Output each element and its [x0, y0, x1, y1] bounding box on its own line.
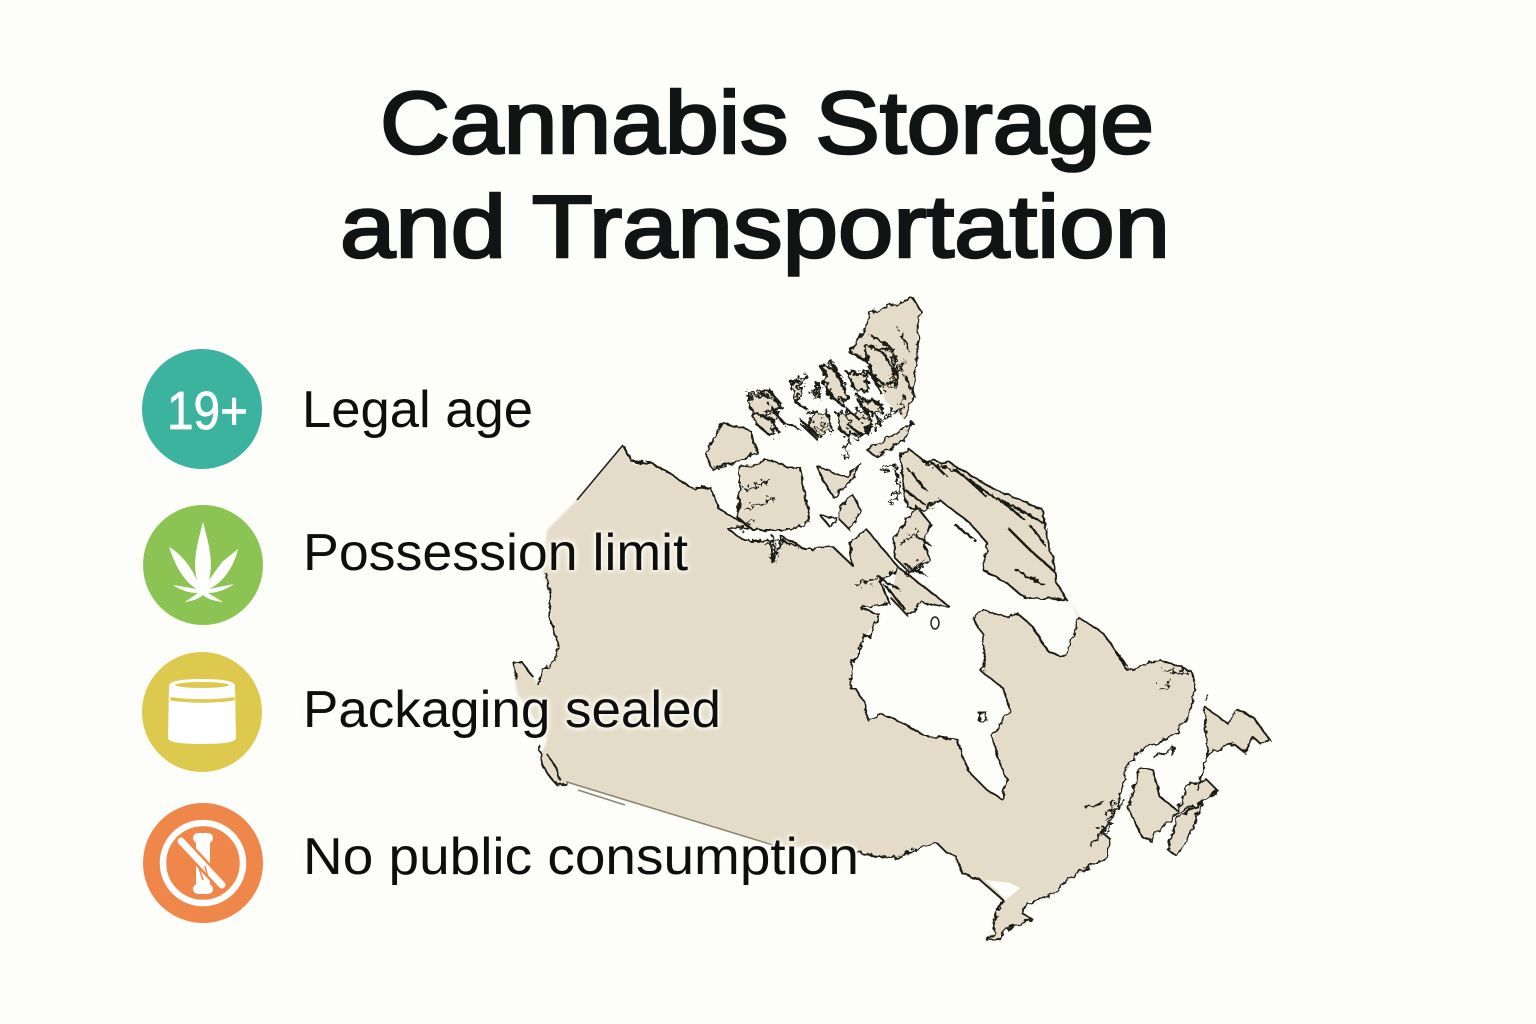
Baffin and Foxe Basin scribbles [740, 462, 1055, 610]
icon: no smoking sign [143, 803, 263, 923]
Ellesmere Island [850, 298, 920, 420]
Atlantic coastlines [1085, 695, 1270, 856]
icon: 19+ badge [142, 349, 262, 469]
Banks Island [705, 423, 757, 470]
Southampton Island [893, 507, 930, 573]
Arctic islands [705, 298, 1067, 615]
label: legal age: Legal age [302, 381, 533, 439]
Queen Elizabeth Islands scribbles [748, 330, 913, 460]
Atlantic provinces [1085, 695, 1270, 856]
title: and Transportation [340, 177, 1170, 276]
Melville Peninsula [890, 567, 950, 615]
Coats island oval [931, 617, 939, 629]
Nova Scotia peninsula [1168, 803, 1203, 856]
label: no public consumption: No public consumption [303, 828, 859, 886]
legend item: legal age [142, 349, 533, 469]
Alaska border line [577, 445, 623, 500]
legend item: possession limit [143, 505, 689, 625]
Nova Scotia and New Brunswick [1128, 767, 1217, 840]
Quebec coast scribbles [772, 540, 1188, 835]
Arctic coastlines [705, 298, 1067, 615]
Hudson Bay island [978, 712, 987, 722]
map of Canada [513, 298, 1270, 940]
Newfoundland [1205, 707, 1270, 755]
Devon Island [867, 423, 913, 457]
Pacific coastline [513, 573, 567, 785]
Queen Elizabeth Islands patches [748, 347, 896, 437]
northern and eastern coastline [623, 445, 1196, 940]
Victoria Island [737, 460, 810, 530]
mainland [513, 445, 1196, 940]
Lake Huron cut-out [985, 880, 1020, 900]
icon: sealed jar [142, 652, 262, 772]
title: Cannabis Storage [380, 73, 1154, 172]
label: possession limit: Possession limit [303, 524, 689, 582]
icon: cannabis leaf [143, 505, 263, 625]
label: packaging sealed: Packaging sealed [303, 681, 721, 739]
southern border line [567, 782, 773, 845]
title [340, 73, 1170, 276]
Somerset Island [818, 463, 860, 497]
icon: 19+ badge: 19+ [167, 381, 248, 441]
Baffin Island [900, 450, 1067, 600]
legend item: packaging sealed [142, 652, 721, 772]
King William Island [840, 495, 860, 530]
legend item: no public consumption [143, 803, 859, 923]
